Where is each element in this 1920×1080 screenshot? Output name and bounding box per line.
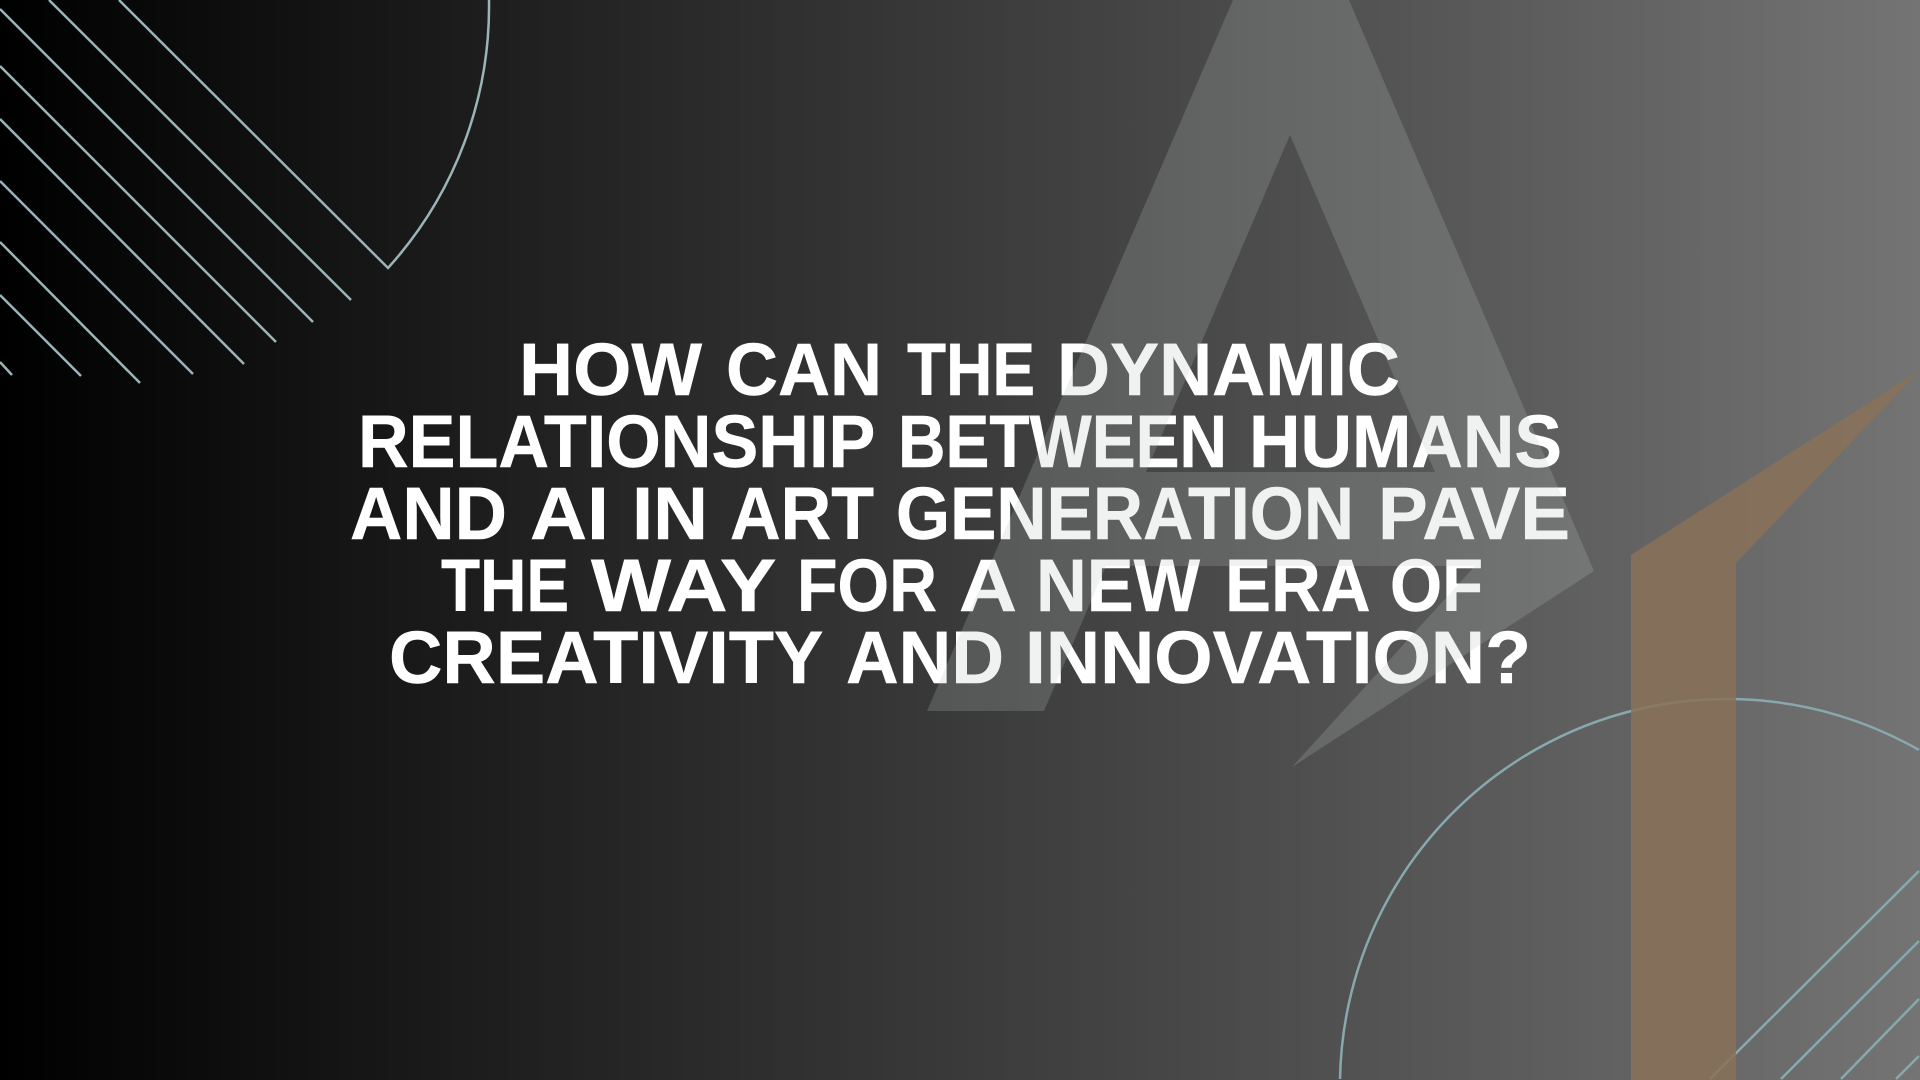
title question: CAN	[726, 328, 882, 411]
title question: WAY	[591, 544, 776, 627]
title question: AI	[530, 472, 609, 555]
title question: ART	[730, 472, 874, 555]
title question: AND	[846, 616, 1004, 699]
title question: HOW	[519, 328, 702, 411]
title question: A	[959, 544, 1015, 627]
title question: PAVE	[1378, 472, 1570, 555]
title question: INNOVATION?	[1025, 616, 1531, 699]
tan letter I shape	[1631, 370, 1920, 1080]
title question: IN	[632, 472, 708, 555]
title question: ERA	[1225, 544, 1369, 627]
top-left arc and diagonal stripes	[0, 0, 489, 383]
title question: OF	[1390, 544, 1483, 627]
title question: HUMANS	[1249, 400, 1562, 483]
title question: NEW	[1036, 544, 1200, 627]
title question: AND	[350, 472, 507, 555]
translucent letter A watermark	[927, 0, 1594, 767]
title question: CREATIVITY	[389, 616, 823, 699]
bottom-right arc and diagonal stripes	[1340, 699, 1919, 1079]
title question: DYNAMIC	[1057, 328, 1400, 411]
title question: RELATIONSHIP	[358, 400, 874, 483]
title question: GENERATION	[896, 472, 1354, 555]
title question	[350, 328, 1570, 699]
title question: FOR	[797, 544, 937, 627]
title question: THE	[907, 328, 1035, 411]
title question: THE	[441, 544, 569, 627]
title question: BETWEEN	[898, 400, 1227, 483]
